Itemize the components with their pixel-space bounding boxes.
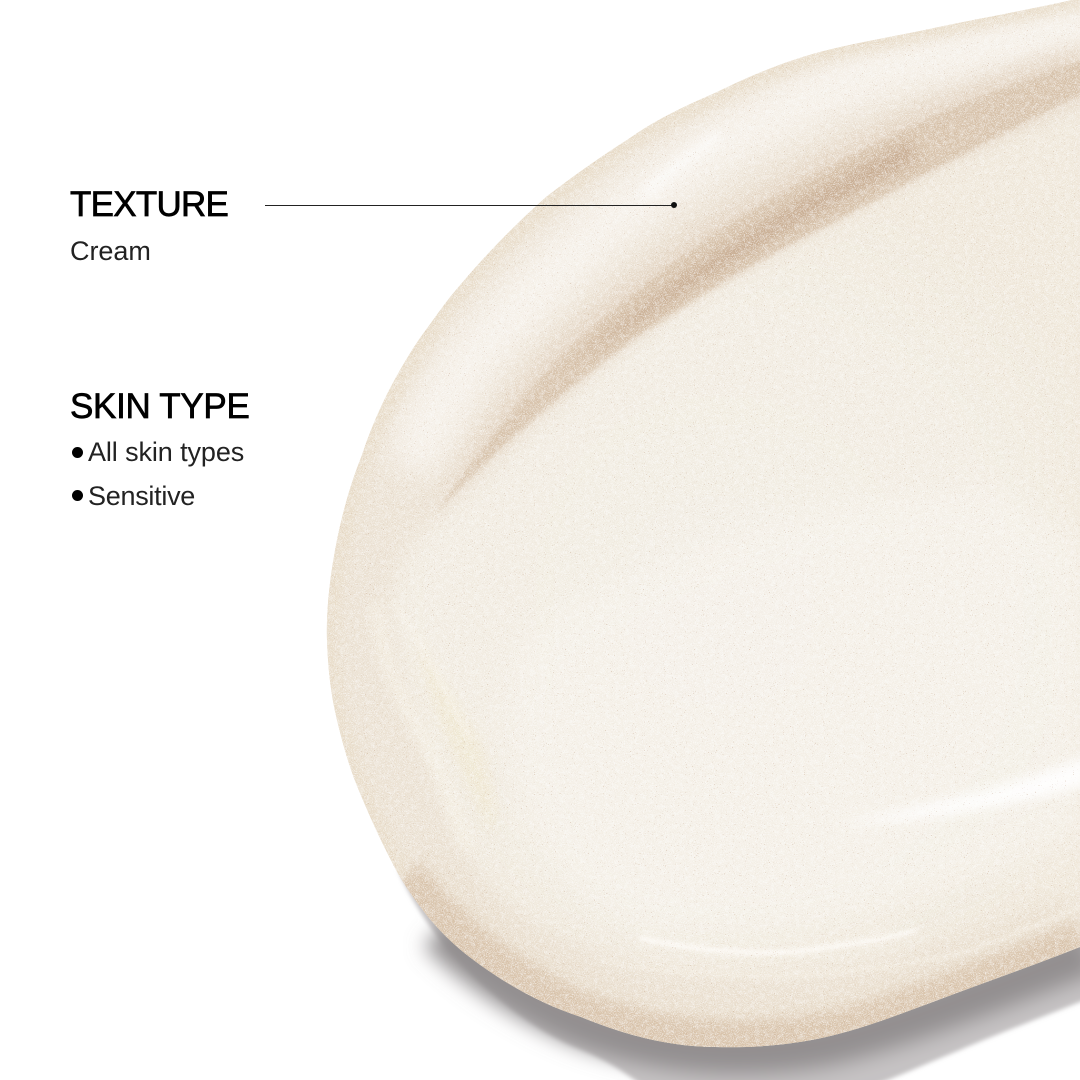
groove soft shadow bbox=[458, 42, 1080, 474]
groove bbox=[436, 60, 1080, 512]
rim shading bbox=[327, 0, 1080, 877]
sweep highlight bbox=[874, 757, 1080, 822]
bottom lip tone bbox=[442, 932, 1076, 1048]
cream swatch illustration bbox=[326, 0, 1080, 1080]
heading: texture: TEXTURE bbox=[70, 185, 228, 224]
shimmer grain bbox=[327, 0, 1080, 1047]
bullet item: sensitive: Sensitive bbox=[88, 481, 195, 511]
white centre glow bbox=[908, 554, 1080, 877]
left fold bbox=[374, 616, 492, 816]
text: cream: Cream bbox=[70, 236, 151, 266]
ridge streak bbox=[645, 136, 718, 195]
bullet item: all skin types: All skin types bbox=[88, 437, 244, 467]
heading: skin type: SKIN TYPE bbox=[70, 387, 250, 426]
inner pool bbox=[396, 227, 1078, 964]
drop shadow bbox=[398, 870, 1080, 1080]
lip highlights bbox=[640, 930, 916, 953]
callout line with dot bbox=[265, 202, 677, 208]
bullet list: skin types bbox=[72, 437, 244, 511]
ridge highlight bbox=[420, 25, 1080, 445]
cream blob bbox=[326, 0, 1080, 1048]
